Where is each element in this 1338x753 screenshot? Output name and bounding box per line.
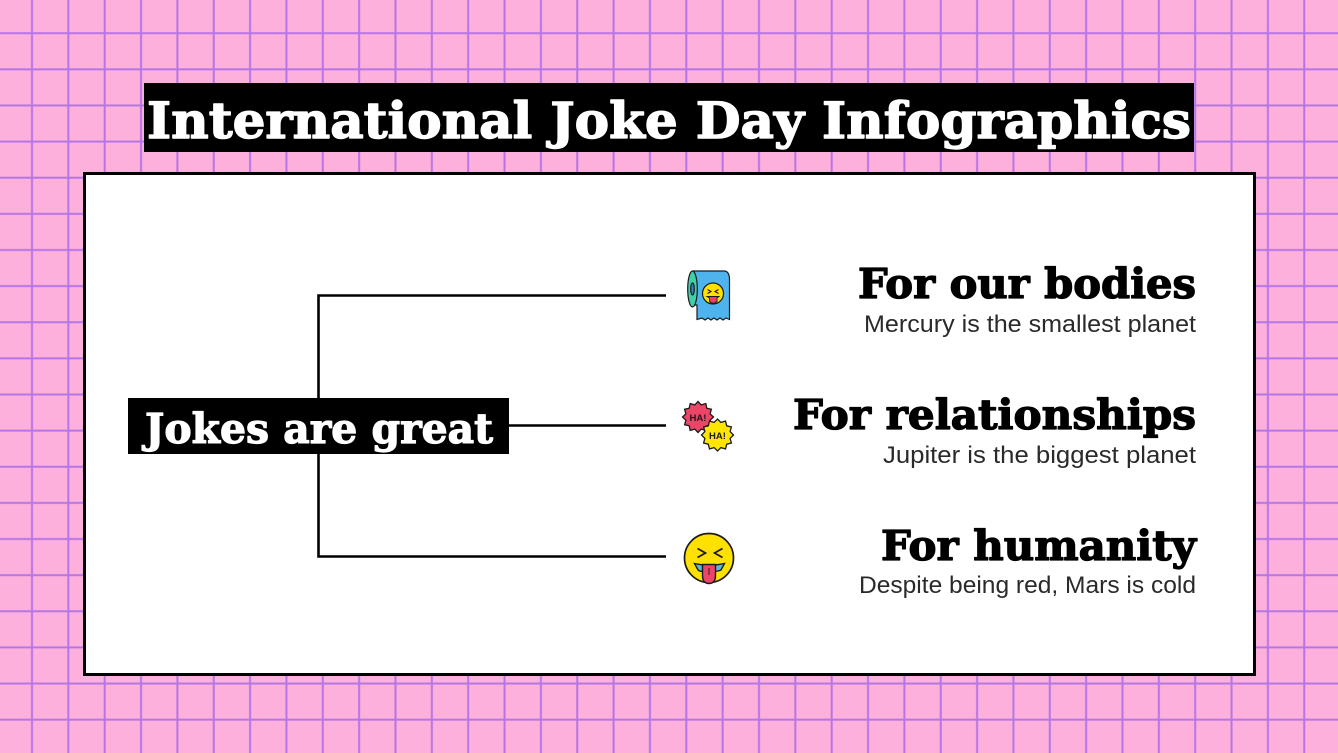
icon: toilet paper roll <box>688 271 730 320</box>
connector lines <box>318 296 666 556</box>
icon: HA! speech bursts <box>682 402 734 451</box>
description: Jupiter is the biggest planet <box>883 442 1196 469</box>
burst: yellow HA!: HA! <box>709 431 726 442</box>
panel: white card <box>84 174 1254 674</box>
item 2: For relationships <box>793 391 1196 469</box>
heading: For our bodies <box>858 260 1196 308</box>
description: Mercury is the smallest planet <box>864 311 1196 338</box>
central label: Jokes are great: Jokes are great <box>142 405 493 453</box>
heading: For humanity <box>881 522 1197 570</box>
icon: laughing face with tongue <box>684 534 734 584</box>
heading: For relationships <box>793 391 1196 439</box>
burst: red HA!: HA! <box>690 413 706 424</box>
item 3: For humanity <box>859 522 1197 599</box>
title: International Joke Day Infographics <box>147 91 1191 150</box>
item 1: For our bodies <box>858 260 1196 338</box>
description: Despite being red, Mars is cold <box>859 572 1196 599</box>
